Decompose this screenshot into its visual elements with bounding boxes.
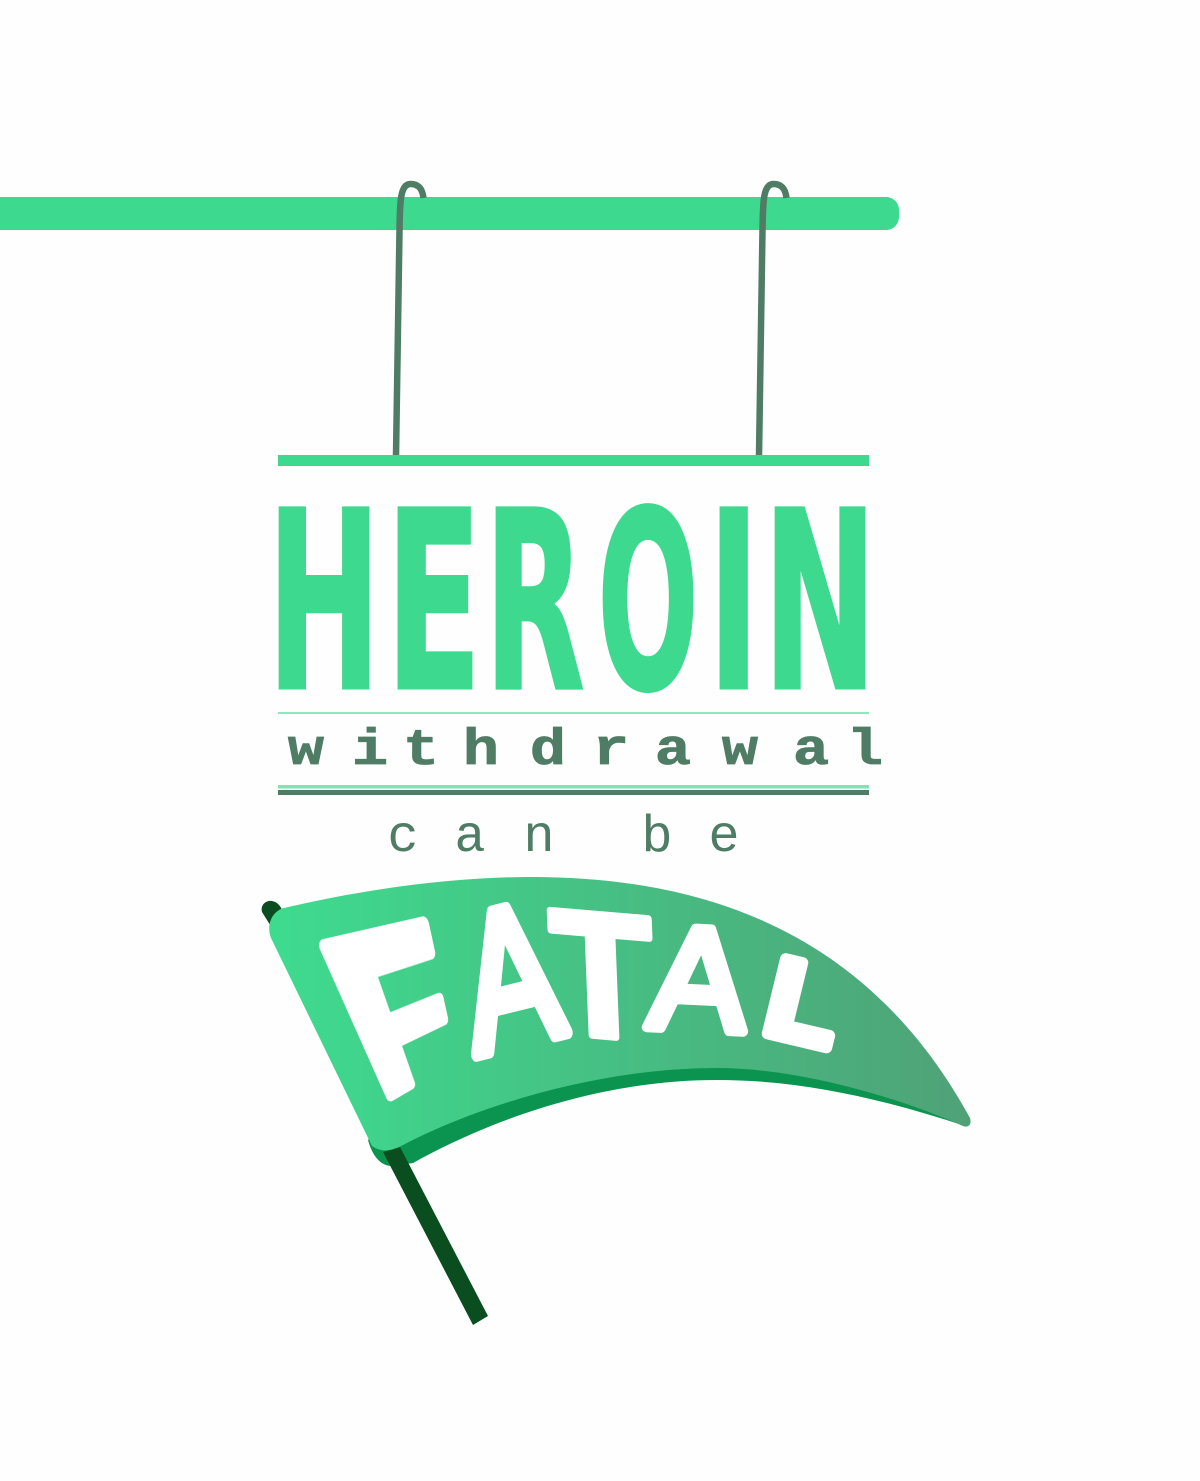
flag letters: ATAL: T [547,872,657,1079]
flag body [269,877,971,1150]
hanging hooks [396,184,786,456]
divider lines around withdrawal [278,712,869,795]
heading: HEROIN: I [708,460,760,747]
flag letters: ATAL [446,858,854,1097]
flag letter: F: F [237,755,843,1481]
heading: HEROIN: H [267,460,381,747]
flag letters: ATAL: A [644,895,754,1063]
heading: HEROIN: R [484,459,585,747]
heading: HEROIN [267,459,877,747]
text: withdrawal: withdrawal [288,722,883,780]
flag shadow fold [368,1010,965,1166]
left hook [396,184,424,456]
text: can be: can be [387,808,740,867]
right hook [759,184,786,456]
flag pole [262,901,488,1325]
heading: HEROIN: N [763,460,877,747]
flag letters: ATAL: A [446,858,576,1097]
heading: HEROIN: O [598,459,699,747]
heading: HEROIN: E [386,460,482,747]
sign top rule [278,455,869,466]
flag letters: ATAL: L [754,934,854,1072]
sign rail [0,197,899,230]
flag [262,858,971,1325]
